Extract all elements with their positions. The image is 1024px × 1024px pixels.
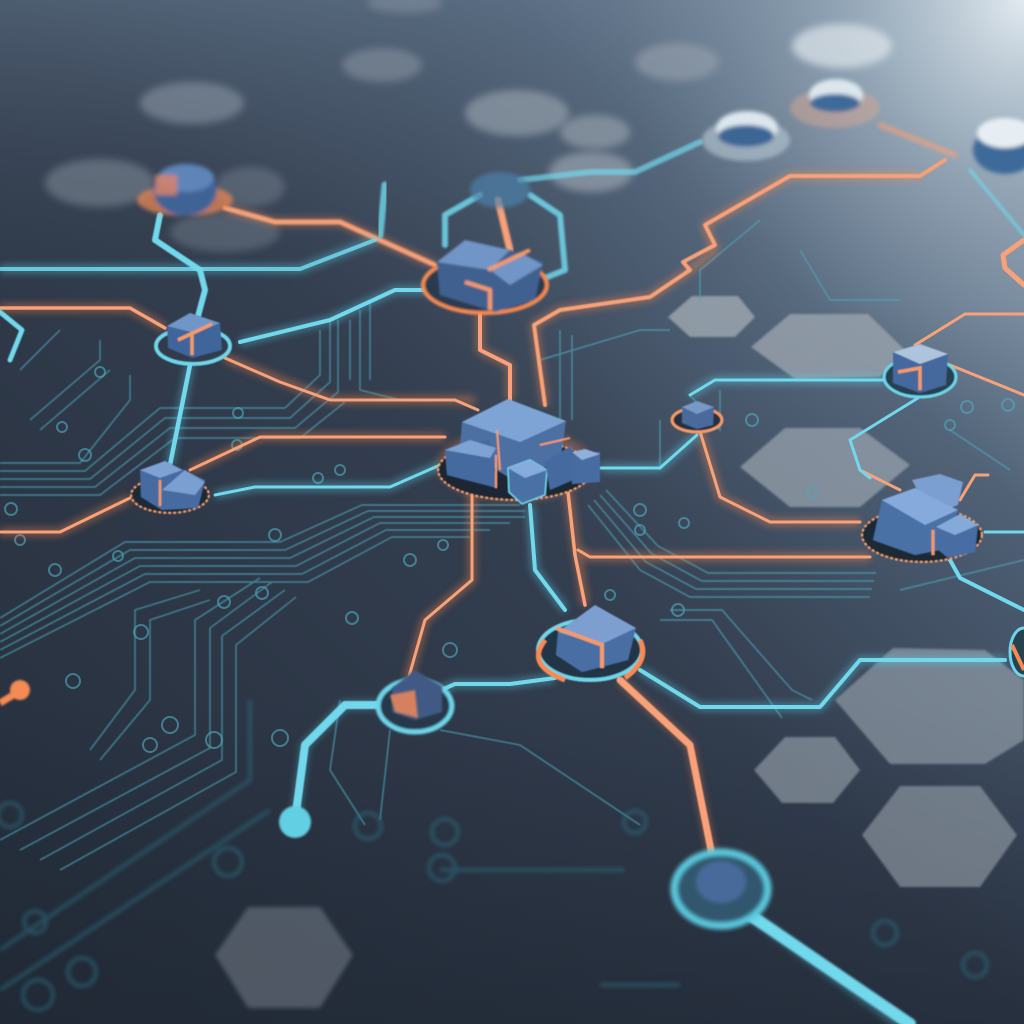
cyan terminal	[279, 806, 311, 838]
node: right upper node	[884, 344, 956, 397]
orange stub left	[0, 680, 30, 703]
node: small center node	[672, 401, 722, 432]
sharp grey hexagons	[668, 296, 1024, 887]
faint circuit traces	[0, 220, 1024, 870]
blurred foreground traces and pads	[0, 700, 987, 1010]
cyan network lines glow	[0, 240, 1005, 1024]
node: lower left node	[378, 670, 452, 732]
orange network lines	[0, 125, 1024, 855]
node: large central cluster	[437, 399, 600, 504]
node: right edge node	[1010, 628, 1024, 676]
blurred foreground hexagon	[215, 907, 353, 1008]
node: left lower node	[131, 461, 209, 513]
node: upper right blurred nodes	[470, 79, 1024, 208]
node: bottom round node	[674, 852, 768, 926]
node: top center cluster	[423, 240, 547, 313]
node: lower center node	[538, 605, 643, 680]
circuit pads	[5, 367, 1014, 752]
node: left middle node	[156, 313, 230, 364]
orange network lines glow	[0, 176, 920, 855]
node: upper left node	[137, 164, 233, 216]
blurred grey hexagons	[45, 0, 892, 252]
node: right cluster	[862, 474, 982, 562]
